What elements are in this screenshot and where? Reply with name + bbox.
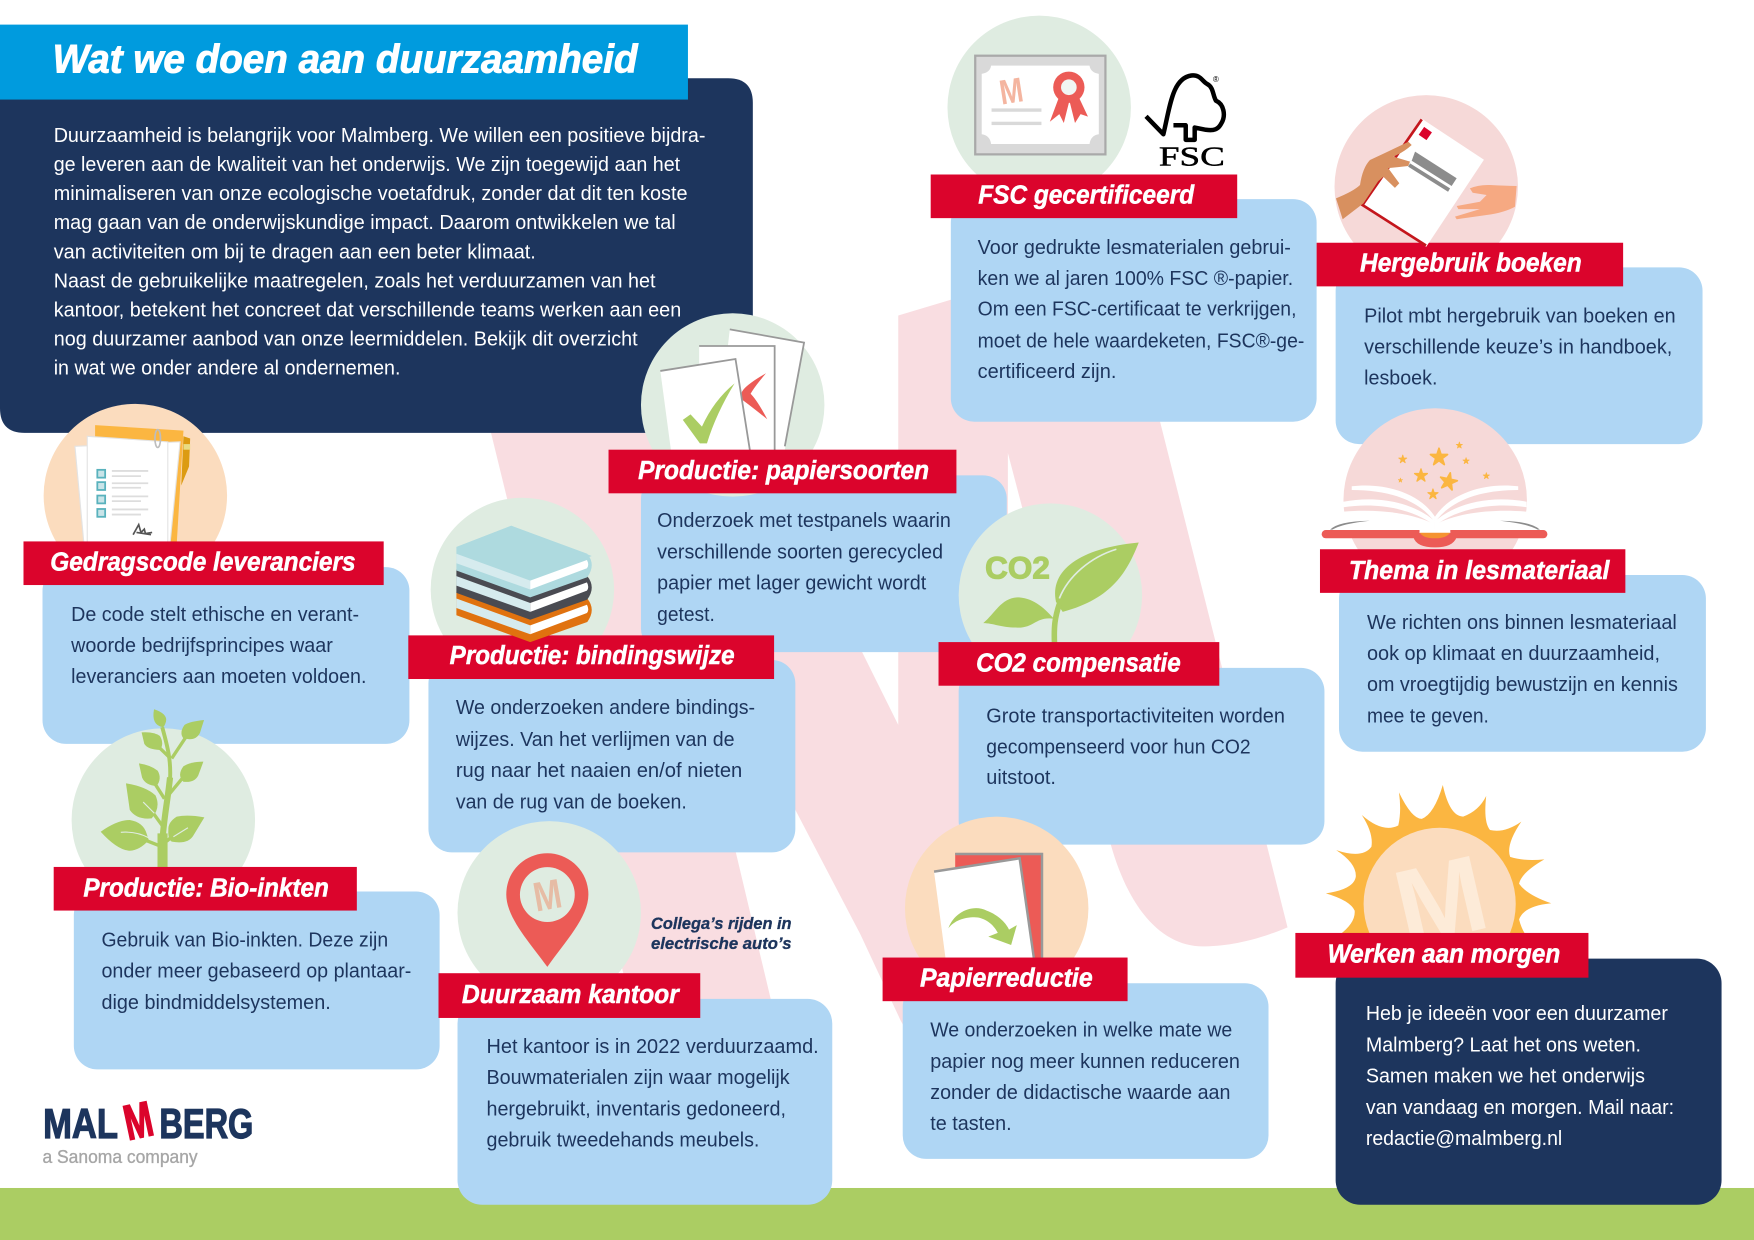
body text: papier nog meer kunnen reduceren <box>930 1050 1240 1073</box>
body text: Malmberg? Laat het ons weten. <box>1366 1034 1641 1057</box>
body text: ken we al jaren 100% FSC ®-papier. <box>978 267 1293 290</box>
header bar <box>438 973 700 1018</box>
icon: location pin <box>506 853 588 967</box>
icon: FSC logo <box>1146 75 1225 173</box>
body text: lesboek. <box>1364 366 1437 389</box>
card <box>959 668 1324 845</box>
panel: Productie papiersoorten <box>609 313 1007 652</box>
header bar <box>1317 243 1623 286</box>
panel: introduction <box>0 25 753 433</box>
body text: zonder de didactische waarde aan <box>930 1081 1230 1104</box>
callout: electric cars: Collega’s rijden in <box>651 914 792 933</box>
body text: getest. <box>657 603 715 626</box>
heading: Productie: Bio-inkten <box>83 874 329 902</box>
body text: Onderzoek met testpanels waarin <box>657 509 951 532</box>
icon: sun with M <box>1326 785 1551 980</box>
header bar <box>883 958 1128 1001</box>
body text: leveranciers aan moeten voldoen. <box>71 665 366 688</box>
body text: Heb je ideeën voor een duurzamer <box>1366 1002 1668 1025</box>
heading: Productie: bindingswijze <box>450 642 735 670</box>
card <box>1339 575 1706 752</box>
intro text: in wat we onder andere al ondernemen. <box>54 357 400 380</box>
card <box>1336 959 1722 1205</box>
header bar <box>54 867 357 911</box>
title bar <box>0 25 688 100</box>
body text <box>657 509 951 626</box>
body text: Om een FSC-certificaat te verkrijgen, <box>978 298 1296 321</box>
body text: om vroegtijdig bewustzijn en kennis <box>1367 673 1678 696</box>
circle <box>905 817 1088 1000</box>
panel: Productie Bio-inkten <box>54 709 440 1069</box>
body text: certificeerd zijn. <box>978 360 1116 383</box>
background: green ground strip <box>0 1188 1754 1240</box>
panel: Werken aan morgen <box>1295 785 1722 1205</box>
body text: Samen maken we het onderwijs <box>1366 1065 1645 1088</box>
body text: hergebruikt, inventaris gedoneerd, <box>486 1098 786 1121</box>
intro text: van activiteiten om bij te dragen aan een beter klimaat. <box>54 240 536 263</box>
icon: growing plant <box>101 709 204 868</box>
title: Wat we doen aan duurzaamheid <box>53 36 639 81</box>
icon: FSC logo: ® <box>1213 75 1219 84</box>
logo: Malmberg: BERG <box>159 1100 253 1147</box>
body text: te tasten. <box>930 1112 1012 1135</box>
body text <box>1367 611 1678 728</box>
body text <box>1364 305 1676 389</box>
body text: onder meer gebaseerd op plantaar- <box>101 960 411 983</box>
body text: Het kantoor is in 2022 verduurzaamd. <box>486 1035 819 1058</box>
icon: paper sheets with check and cross <box>660 329 804 452</box>
icon: paper with arrow <box>934 853 1042 959</box>
body text: moet de hele waardeketen, FSC®-ge- <box>978 329 1304 352</box>
body text: De code stelt ethische en verant- <box>71 603 359 626</box>
logo: Malmberg: MAL <box>43 1100 118 1147</box>
panel: Thema in lesmateriaal <box>1320 408 1706 752</box>
card <box>43 567 409 744</box>
panel: Papierreductie <box>883 817 1269 1159</box>
body text <box>930 1019 1240 1135</box>
icon: hands passing a book <box>1336 119 1517 246</box>
body text: van de rug van de boeken. <box>456 790 687 813</box>
body text: gecompenseerd voor hun CO2 <box>986 735 1251 758</box>
card <box>428 660 795 852</box>
body text <box>101 928 411 1014</box>
heading: Duurzaam kantoor <box>462 981 681 1009</box>
body text: Bouwmaterialen zijn waar mogelijk <box>486 1066 790 1089</box>
logo: Malmberg <box>43 1091 253 1167</box>
panel: Hergebruik boeken <box>1317 95 1703 444</box>
body text: verschillende keuze’s in handboek, <box>1364 335 1672 358</box>
circle <box>947 16 1131 199</box>
body text: Voor gedrukte lesmaterialen gebrui- <box>978 236 1291 259</box>
icon: certificate: M <box>997 71 1026 113</box>
callout: electric cars <box>651 914 792 953</box>
body text <box>978 236 1304 383</box>
circle <box>1335 95 1518 279</box>
body text: wijzes. Van het verlijmen van de <box>455 728 735 751</box>
body text: mee te geven. <box>1367 705 1489 728</box>
panel: Duurzaam kantoor <box>438 821 832 1205</box>
card <box>74 892 440 1069</box>
intro text: ge leveren aan de kwaliteit van het onderwijs. We zijn toegewijd aan het <box>54 153 680 176</box>
intro navy box <box>0 78 753 433</box>
header bar <box>609 450 956 493</box>
card <box>903 983 1269 1159</box>
header bar <box>23 541 384 585</box>
heading: Productie: papiersoorten <box>638 457 929 485</box>
body text <box>455 696 755 813</box>
logo: Malmberg: a Sanoma company <box>43 1146 198 1167</box>
background: pink Malmberg M <box>475 257 1288 1091</box>
circle <box>431 498 614 681</box>
icon: stack of books <box>456 526 592 642</box>
intro text: Duurzaamheid is belangrijk voor Malmberg. We willen een positieve bijdra- <box>54 124 705 147</box>
circle <box>72 728 255 912</box>
panel: Gedragscode leveranciers <box>23 404 409 744</box>
icon: CO2 plant: CO2 <box>985 550 1050 585</box>
body text <box>486 1035 819 1152</box>
circle <box>458 821 641 1005</box>
body text: We onderzoeken andere bindings- <box>456 696 755 719</box>
body text <box>986 704 1285 789</box>
body text: Pilot mbt hergebruik van boeken en <box>1364 305 1676 328</box>
heading: FSC gecertificeerd <box>978 181 1195 209</box>
intro text: mag gaan van de onderwijskundige impact. Daarom ontwikkelen we tal <box>54 211 676 234</box>
panel: FSC gecertificeerd <box>931 16 1317 422</box>
heading: Werken aan morgen <box>1328 941 1560 969</box>
body text: rug naar het naaien en/of nieten <box>456 759 742 782</box>
heading: Hergebruik boeken <box>1360 250 1582 278</box>
body text: papier met lager gewicht wordt <box>657 572 926 595</box>
header bar <box>1295 933 1588 978</box>
body text: Gebruik van Bio-inkten. Deze zijn <box>101 928 388 951</box>
icon: clipboard with checklist <box>75 425 190 544</box>
body text: We richten ons binnen lesmateriaal <box>1367 611 1677 634</box>
circle <box>44 404 227 587</box>
icon: sun with M: M <box>1384 832 1498 969</box>
panel: CO2 compensatie <box>939 503 1324 845</box>
body text: verschillende soorten gerecycled <box>657 540 943 563</box>
body text: ook op klimaat en duurzaamheid, <box>1367 642 1660 665</box>
callout: electric cars: electrische auto’s <box>651 934 792 953</box>
intro text: Naast de gebruikelijke maatregelen, zoals het verduurzamen van het <box>54 269 656 292</box>
body text: van vandaag en morgen. Mail naar: <box>1366 1096 1674 1119</box>
circle <box>641 313 824 497</box>
header bar <box>939 642 1219 686</box>
logo: Malmberg: M <box>119 1091 158 1151</box>
card <box>458 999 832 1205</box>
heading: Thema in lesmateriaal <box>1349 557 1610 585</box>
icon: CO2 plant <box>983 543 1139 644</box>
body text: dige bindmiddelsystemen. <box>101 991 331 1014</box>
body text: We onderzoeken in welke mate we <box>930 1019 1232 1042</box>
intro text: kantoor, betekent het concreet dat verschillende teams werken aan een <box>54 299 681 322</box>
intro text <box>54 124 705 380</box>
body text: woorde bedrijfsprincipes waar <box>70 634 333 657</box>
body text: uitstoot. <box>986 766 1056 789</box>
panel: Productie bindingswijze <box>408 498 795 852</box>
card <box>951 199 1317 422</box>
icon: FSC logo: FSC <box>1159 142 1225 173</box>
body text <box>70 603 366 688</box>
card <box>641 475 1007 652</box>
header bar <box>931 175 1237 218</box>
heading: CO2 compensatie <box>976 650 1181 678</box>
body text: gebruik tweedehands meubels. <box>486 1129 759 1152</box>
intro text: nog duurzamer aanbod van onze leermiddelen. Bekijk dit overzicht <box>54 328 638 351</box>
heading: Gedragscode leveranciers <box>50 549 356 577</box>
body text: redactie@malmberg.nl <box>1366 1127 1562 1150</box>
circle <box>959 503 1142 687</box>
icon: location pin: M <box>530 870 565 920</box>
intro text: minimaliseren van onze ecologische voetafdruk, zonder dat dit ten koste <box>54 182 688 205</box>
card <box>1336 267 1703 444</box>
body text <box>1366 1002 1674 1150</box>
icon: certificate <box>975 56 1105 154</box>
header bar <box>1320 549 1625 593</box>
circle <box>1343 408 1527 592</box>
header bar <box>408 635 774 679</box>
heading: Papierreductie <box>920 965 1093 993</box>
body text: Grote transportactiviteiten worden <box>986 704 1285 727</box>
icon: open book with stars <box>1322 442 1547 547</box>
